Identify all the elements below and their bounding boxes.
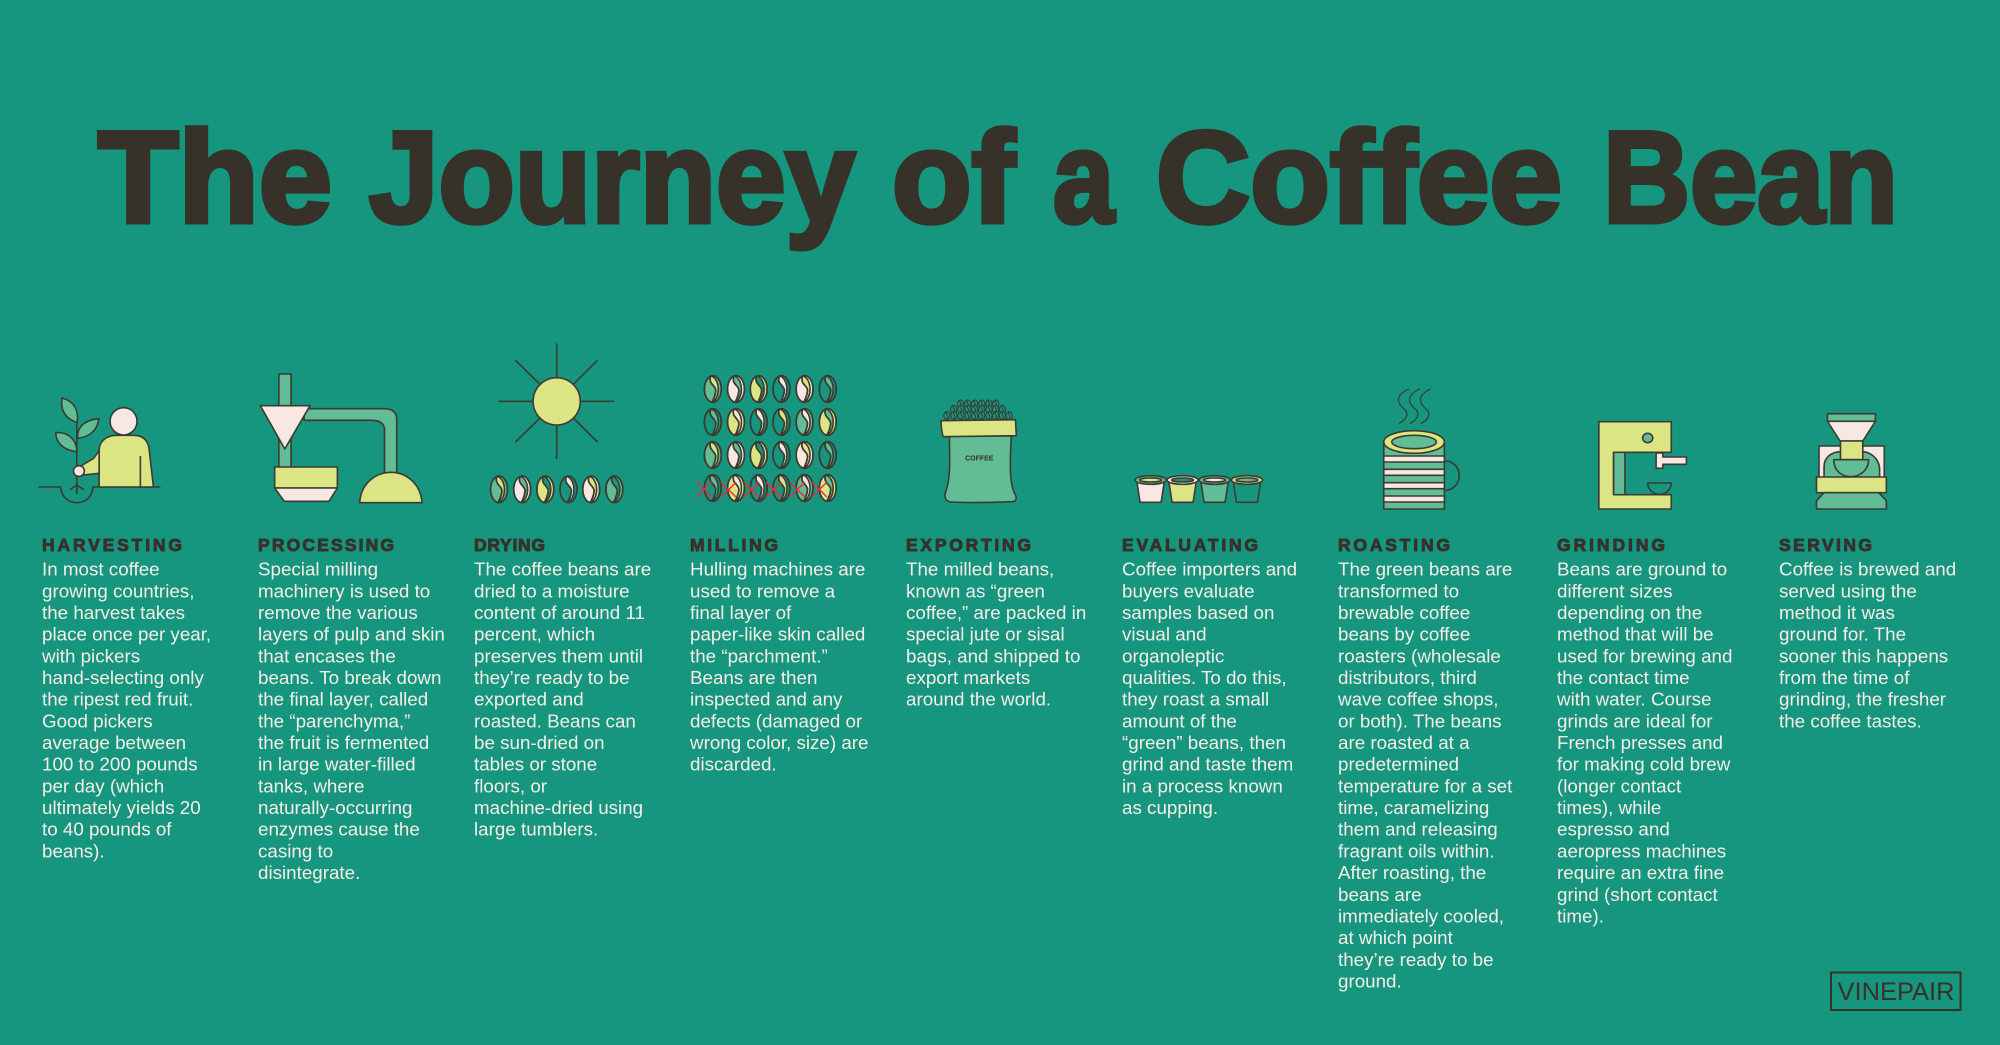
text block: drying: roasted. Beans can xyxy=(474,710,636,731)
text block: roasting: predetermined xyxy=(1338,754,1459,775)
text block: milling: MILLING xyxy=(690,535,778,555)
icon: roasting mug xyxy=(1384,389,1459,509)
text block: harvesting: beans). xyxy=(42,840,105,861)
text block: processing: beans. To break down xyxy=(258,667,441,688)
text block: milling: defects (damaged or xyxy=(690,710,862,731)
title: a xyxy=(1053,104,1115,250)
text block: roasting: them and releasing xyxy=(1338,819,1498,840)
text block: processing: that encases the xyxy=(258,645,396,666)
text block: serving xyxy=(1779,535,1956,731)
text block: harvesting: In most coffee xyxy=(42,559,160,580)
text block: drying: they’re ready to be xyxy=(474,667,630,688)
text block: roasting: distributors, third xyxy=(1338,667,1477,688)
text block: grinding: aeropress machines xyxy=(1557,840,1726,861)
text block: drying: exported and xyxy=(474,689,584,710)
icon: drying xyxy=(491,344,623,503)
text block: milling: inspected and any xyxy=(690,689,843,710)
title xyxy=(98,104,1898,250)
text block: grinding: depending on the xyxy=(1557,602,1702,623)
text block: milling: Hulling machines are xyxy=(690,559,865,580)
text block: evaluating: as cupping. xyxy=(1122,797,1218,818)
text block: processing: casing to xyxy=(258,840,333,861)
text block: grinding: GRINDING xyxy=(1557,535,1665,555)
text block: grinding: used for brewing and xyxy=(1557,645,1732,666)
text block: harvesting: the ripest red fruit. xyxy=(42,689,193,710)
text block: roasting: or both). The beans xyxy=(1338,710,1502,731)
text block: harvesting: place once per year, xyxy=(42,624,211,645)
text block: grinding: times), while xyxy=(1557,797,1661,818)
text block: evaluating: they roast a small xyxy=(1122,689,1269,710)
text block: drying: dried to a moisture xyxy=(474,580,630,601)
text block: roasting xyxy=(1337,535,1513,991)
text block: drying: large tumblers. xyxy=(474,819,598,840)
text block: roasting: ground. xyxy=(1338,970,1402,991)
text block: exporting xyxy=(906,535,1086,710)
text block: grinding: espresso and xyxy=(1557,819,1670,840)
text block: serving: SERVING xyxy=(1779,535,1872,555)
text block: exporting: coffee,” are packed in xyxy=(906,602,1086,623)
text block: harvesting xyxy=(41,535,211,861)
text block: drying: percent, which xyxy=(474,624,595,645)
text block: grinding: method that will be xyxy=(1557,624,1714,645)
logo: VinePair xyxy=(1831,972,1960,1010)
text block: grinding: grinds are ideal for xyxy=(1557,710,1713,731)
text block: drying: content of around 11 xyxy=(474,602,645,623)
text block: evaluating: qualities. To do this, xyxy=(1122,667,1287,688)
text block: processing: the “parenchyma,” xyxy=(258,710,410,731)
text block: processing: the fruit is fermented xyxy=(258,732,429,753)
text block: harvesting: the harvest takes xyxy=(42,602,185,623)
text block: harvesting: 100 to 200 pounds xyxy=(42,754,198,775)
text block: processing: Special milling xyxy=(258,559,378,580)
text block: roasting: transformed to xyxy=(1338,580,1459,601)
text block: processing: layers of pulp and skin xyxy=(258,624,445,645)
text block: roasting: at which point xyxy=(1338,927,1454,948)
text block: drying xyxy=(474,535,651,840)
text block: harvesting: with pickers xyxy=(41,645,140,666)
text block: processing: remove the various xyxy=(258,602,418,623)
text block: processing: naturally-occurring xyxy=(258,797,412,818)
text block: processing: enzymes cause the xyxy=(258,819,420,840)
text block: roasting: immediately cooled, xyxy=(1338,905,1504,926)
text block: exporting: export markets xyxy=(906,667,1030,688)
text block: processing: PROCESSING xyxy=(258,535,394,555)
text block: processing: tanks, where xyxy=(258,775,364,796)
text block: roasting: beans are xyxy=(1338,884,1422,905)
text block: harvesting: growing countries, xyxy=(42,580,194,601)
text block: exporting: The milled beans, xyxy=(906,559,1054,580)
text block: roasting: time, caramelizing xyxy=(1338,797,1489,818)
text block: harvesting: Good pickers xyxy=(42,710,153,731)
icon: exporting coffee sack: COFFEE xyxy=(965,456,994,463)
text block: grinding: for making cold brew xyxy=(1557,754,1731,775)
icon: evaluating cups xyxy=(1135,476,1263,502)
text block: roasting: they’re ready to be xyxy=(1338,949,1494,970)
text block: milling: used to remove a xyxy=(690,580,836,601)
text block: milling: final layer of xyxy=(690,602,792,623)
text block: exporting: bags, and shipped to xyxy=(906,645,1080,666)
text block: grinding xyxy=(1556,535,1732,926)
text block: drying: machine-dried using xyxy=(474,797,643,818)
text block: exporting: EXPORTING xyxy=(906,535,1031,555)
title: of xyxy=(892,104,1016,250)
text block: drying: DRYING xyxy=(474,535,545,555)
text block: processing: disintegrate. xyxy=(258,862,360,883)
icon: milling xyxy=(697,376,836,501)
text block: drying: tables or stone xyxy=(474,754,597,775)
text block: evaluating: grind and taste them xyxy=(1122,754,1293,775)
icon: exporting coffee sack xyxy=(941,400,1016,503)
text block: exporting: special jute or sisal xyxy=(906,624,1065,645)
text block: roasting: brewable coffee xyxy=(1338,602,1470,623)
text block: roasting: fragrant oils within. xyxy=(1338,840,1495,861)
text block: exporting: around the world. xyxy=(906,689,1051,710)
text block: grinding: Beans are ground to xyxy=(1557,559,1727,580)
text block: grinding: the contact time xyxy=(1557,667,1690,688)
text block: evaluating: Coffee importers and xyxy=(1122,559,1297,580)
text block: harvesting: HARVESTING xyxy=(42,535,182,555)
text block: milling: discarded. xyxy=(690,754,777,775)
text block: evaluating: in a process known xyxy=(1122,775,1283,796)
text block: harvesting: average between xyxy=(42,732,186,753)
text block: roasting: beans by coffee xyxy=(1338,624,1470,645)
text block: evaluating: “green” beans, then xyxy=(1122,732,1286,753)
text block: milling: Beans are then xyxy=(690,667,817,688)
text block: roasting: are roasted at a xyxy=(1338,732,1470,753)
text block: harvesting: ultimately yields 20 xyxy=(42,797,201,818)
text block: exporting: known as “green xyxy=(906,580,1045,601)
text block: evaluating: samples based on xyxy=(1122,602,1274,623)
text block: roasting: wave coffee shops, xyxy=(1337,689,1498,710)
text block: evaluating: EVALUATING xyxy=(1122,535,1258,555)
text block: milling xyxy=(689,535,868,775)
title: The xyxy=(98,104,332,250)
text block: grinding: different sizes xyxy=(1557,580,1673,601)
text block: roasting: roasters (wholesale xyxy=(1338,645,1501,666)
icon: serving brewer xyxy=(1816,414,1886,509)
text block: milling: the “parchment.” xyxy=(690,645,828,666)
text block: grinding: with water. Course xyxy=(1556,689,1712,710)
text block: evaluating: amount of the xyxy=(1122,710,1237,731)
text block: processing: machinery is used to xyxy=(258,580,430,601)
text block: serving: the coffee tastes. xyxy=(1779,710,1922,731)
text block: drying: floors, or xyxy=(474,775,547,796)
text block: roasting: The green beans are xyxy=(1338,559,1512,580)
text block: evaluating: organoleptic xyxy=(1122,645,1224,666)
text block: evaluating: visual and xyxy=(1122,624,1207,645)
text block: drying: preserves them until xyxy=(474,645,643,666)
text block: harvesting: to 40 pounds of xyxy=(42,819,172,840)
title: Bean xyxy=(1603,104,1898,250)
title: Journey xyxy=(369,104,855,250)
text block: evaluating: buyers evaluate xyxy=(1122,580,1255,601)
icon: grinding machine xyxy=(1599,422,1686,509)
text block: roasting: temperature for a set xyxy=(1338,775,1513,796)
text block: roasting: After roasting, the xyxy=(1338,862,1486,883)
text block: roasting: ROASTING xyxy=(1338,535,1450,555)
text block: drying: be sun-dried on xyxy=(474,732,605,753)
text block: serving: Coffee is brewed and xyxy=(1779,559,1956,580)
text block: grinding: (longer contact xyxy=(1557,775,1682,796)
text block: processing xyxy=(258,535,445,883)
text block: grinding: time). xyxy=(1557,905,1604,926)
text block: serving: from the time of xyxy=(1779,667,1910,688)
text block: milling: wrong color, size) are xyxy=(689,732,868,753)
text block: serving: method it was xyxy=(1779,602,1895,623)
text block: drying: The coffee beans are xyxy=(474,559,651,580)
text block: processing: the final layer, called xyxy=(258,689,428,710)
text block: serving: sooner this happens xyxy=(1779,645,1948,666)
text block: grinding: grind (short contact xyxy=(1557,884,1719,905)
text block: serving: grinding, the fresher xyxy=(1779,689,1946,710)
icon: processing xyxy=(260,374,422,503)
text block: grinding: require an extra fine xyxy=(1557,862,1724,883)
icon: harvesting xyxy=(39,398,160,503)
text block: milling: paper-like skin called xyxy=(690,624,865,645)
text block: serving: ground for. The xyxy=(1779,624,1906,645)
text block: serving: served using the xyxy=(1779,580,1917,601)
text block: grinding: French presses and xyxy=(1557,732,1723,753)
text block: harvesting: per day (which xyxy=(42,775,164,796)
title: Coffee xyxy=(1156,104,1562,250)
text block: evaluating xyxy=(1122,535,1297,818)
text block: harvesting: hand-selecting only xyxy=(42,667,204,688)
logo: VinePair: VINEPAIR xyxy=(1838,978,1954,1006)
text block: processing: in large water-filled xyxy=(258,754,416,775)
